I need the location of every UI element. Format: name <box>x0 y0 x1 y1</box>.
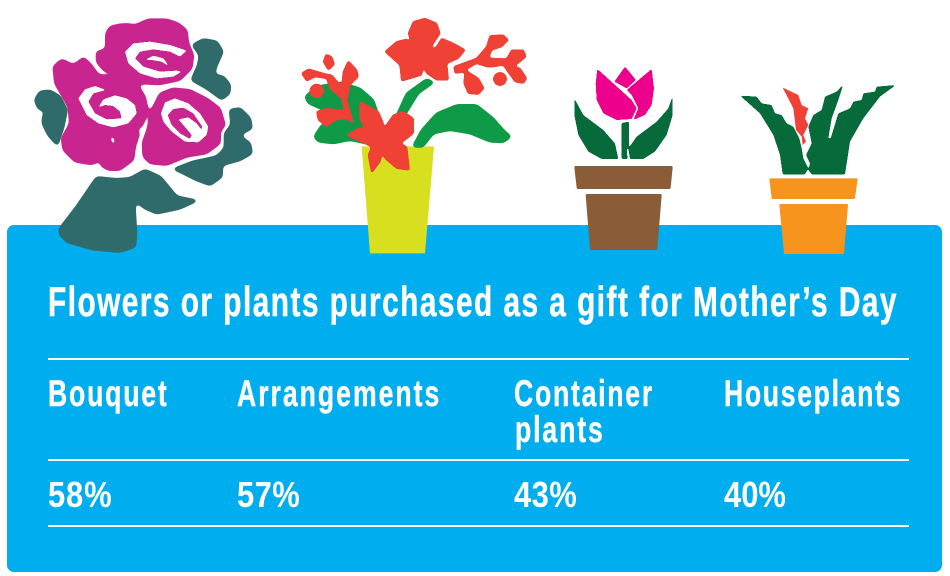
white rose spirals <box>78 42 208 142</box>
table header row: Arrangements <box>237 373 439 414</box>
aloe leaves <box>740 84 896 174</box>
table header row: Container <box>514 373 653 414</box>
table value row <box>48 476 786 516</box>
brown pot <box>576 167 671 249</box>
table value row: 57% <box>237 476 300 516</box>
icon: orchid in yellow vase <box>302 18 527 253</box>
table value row: 43% <box>514 476 577 516</box>
bouquet leaves and wrap <box>35 39 252 252</box>
divider lines <box>48 359 909 526</box>
right rose inner swirl <box>168 108 202 139</box>
tulip bloom <box>596 67 654 120</box>
vase <box>362 146 434 253</box>
title: Flowers or plants purchased as a gift for Mother’s Day <box>48 278 897 325</box>
table value row: 58% <box>48 476 112 516</box>
orchid leaves and stem <box>305 79 511 147</box>
aloe red leaf <box>783 88 808 145</box>
table header row <box>48 373 900 450</box>
icon: tulip in brown pot <box>574 67 673 249</box>
icon: aloe in orange pot <box>740 84 896 253</box>
table value row: 40% <box>724 476 786 516</box>
table header row: Bouquet <box>48 373 167 414</box>
rose blossoms <box>53 19 225 170</box>
panel: blue table background <box>7 225 942 572</box>
orchid blossoms <box>302 18 527 173</box>
table header row: Houseplants <box>724 373 900 414</box>
tulip leaves <box>574 96 673 159</box>
icon: rose bouquet <box>35 19 252 252</box>
table header row: plants <box>515 409 603 450</box>
orange pot <box>770 179 857 253</box>
